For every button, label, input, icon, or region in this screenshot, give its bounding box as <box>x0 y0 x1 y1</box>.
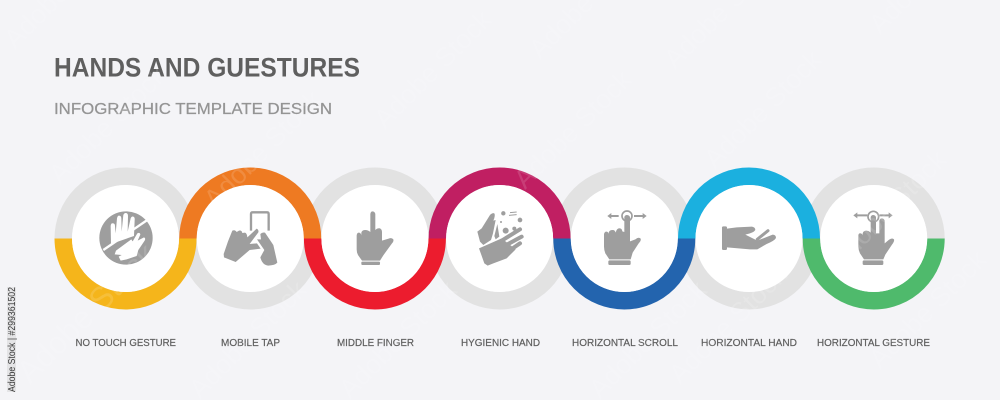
step 1: no touch gesture <box>63 185 188 301</box>
watermark: Adobe Stock <box>663 259 793 389</box>
icon: crossed-out hand <box>99 211 153 265</box>
watermark: Adobe Stock <box>508 64 638 194</box>
watermark: Adobe Stock <box>198 84 328 214</box>
icon: washing hands <box>477 211 522 266</box>
subtitle: INFOGRAPHIC TEMPLATE DESIGN <box>54 101 332 118</box>
grey ring halves <box>63 176 936 301</box>
step 2: mobile tap <box>188 176 312 292</box>
watermark: Adobe Stock <box>9 235 164 390</box>
icon: finger scrolling horizontally <box>604 211 647 265</box>
title: HANDS AND GUESTURES <box>54 53 360 83</box>
label: horizontal hand: HORIZONTAL HAND <box>701 338 797 349</box>
label: mobile tap: MOBILE TAP <box>221 338 280 349</box>
step 4: hygienic hand <box>437 176 562 292</box>
label: hygienic hand: HYGIENIC HAND <box>461 338 540 349</box>
watermark: Adobe Stock <box>368 4 498 134</box>
label: horizontal scroll: HORIZONTAL SCROLL <box>572 338 678 349</box>
step 5: horizontal scroll <box>562 185 687 301</box>
watermark: Adobe Stock <box>823 144 953 274</box>
label: no touch gesture: NO TOUCH GESTURE <box>76 338 176 349</box>
watermark: Adobe Stock <box>43 59 173 189</box>
label: middle finger: MIDDLE FINGER <box>337 338 414 349</box>
step 6: horizontal hand <box>687 176 811 292</box>
watermark: Adobe Stock <box>863 244 993 374</box>
icon: two fingers scrolling <box>853 211 894 265</box>
stock credit: Adobe Stock | #299361502 <box>6 287 18 392</box>
icon: middle finger hand <box>357 211 393 265</box>
icon: hands tapping phone <box>224 212 277 266</box>
label: horizontal gesture: HORIZONTAL GESTURE <box>817 338 930 349</box>
step 3: middle finger <box>313 185 437 301</box>
icon: open hand <box>722 226 776 250</box>
watermark: Adobe Stock <box>698 44 828 174</box>
step 7: horizontal gesture <box>811 185 936 301</box>
